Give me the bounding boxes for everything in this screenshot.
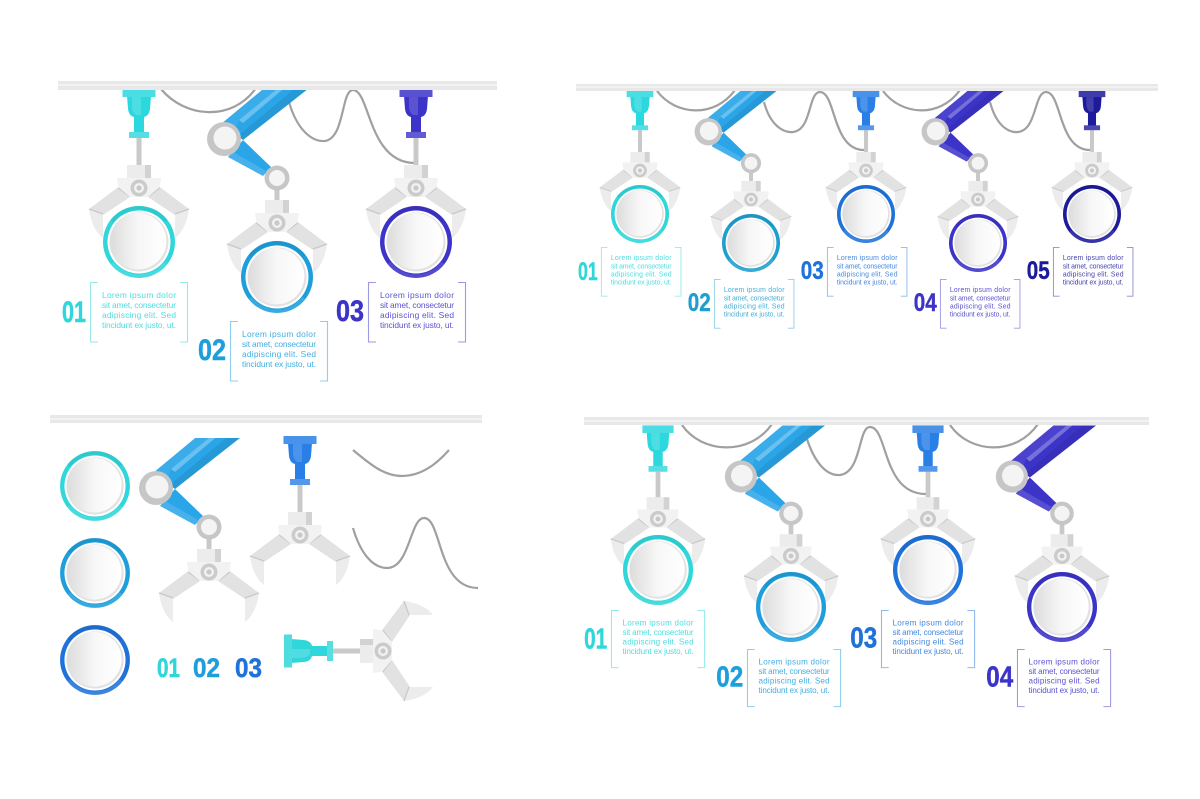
step 02 text: tincidunt ex justo, ut. [724,312,785,319]
step 03 text: tincidunt ex justo, ut. [380,320,454,330]
gripper 01 [611,425,705,605]
step 02 text [198,322,328,381]
step 01 text: sit amet, consectetur [611,263,672,270]
step 01 text: adipiscing elit. Sed [611,272,672,279]
step 01 text: 01 [62,296,86,329]
number labels: 02 [193,653,220,683]
panel: five-step robotic arm template [576,84,1158,328]
gripper 05 [1052,91,1132,243]
step 04 text: Lorem ipsum dolor [950,287,1011,294]
step 02 text: sit amet, consectetur [724,295,785,302]
step 02 text: sit amet, consectetur [242,339,316,349]
horizontal gripper [284,601,433,701]
step 01 text: tincidunt ex justo, ut. [102,320,176,330]
step 03 text: 03 [850,622,877,654]
step 03 text: tincidunt ex justo, ut. [837,280,898,287]
step 04 text [986,649,1111,707]
step 01 text [584,610,705,668]
step 02 text: tincidunt ex justo, ut. [242,359,316,369]
step 02 text: adipiscing elit. Sed [242,349,316,359]
ring cyan [60,451,130,521]
gripper 02 on arm [725,426,838,642]
gripper 03 [881,425,975,605]
step 05 text: Lorem ipsum dolor [1063,255,1124,262]
step 04 text: sit amet, consectetur [950,295,1011,302]
step 02 text: Lorem ipsum dolor [724,287,785,294]
step 03 text: adipiscing elit. Sed [837,272,898,279]
step 03 text: tincidunt ex justo, ut. [893,647,964,656]
step 03 text: sit amet, consectetur [837,263,898,270]
gripper 01 [600,91,680,243]
step 01 text: Lorem ipsum dolor [102,290,176,300]
step 03 text: Lorem ipsum dolor [893,618,964,627]
gripper 04 on arm [996,426,1109,642]
ceiling rail [58,81,497,90]
step 02 text: Lorem ipsum dolor [242,329,316,339]
step 04 text: tincidunt ex justo, ut. [950,312,1011,319]
step 01 text [578,247,681,296]
step 04 text: sit amet, consectetur [1029,667,1100,676]
step 01 text: 01 [584,623,607,655]
step 03 text [850,610,975,668]
step 03 text [801,247,907,296]
step 01 text: sit amet, consectetur [623,628,694,637]
ceiling rail [576,84,1158,91]
cables [682,424,1038,494]
step 03 text [336,282,466,342]
mount with open gripper [250,436,350,585]
step 04 text: Lorem ipsum dolor [1029,657,1100,666]
number labels: 03 [235,653,262,683]
cables [657,90,1090,150]
ceiling rail [50,415,482,423]
step 03 text: 03 [336,295,364,328]
gripper 01 [89,89,189,278]
step 04 text: adipiscing elit. Sed [1029,677,1100,686]
number labels [157,653,262,683]
cable short [353,450,449,476]
step 01 text: adipiscing elit. Sed [102,310,176,320]
step 02 text: 02 [688,290,711,317]
step 04 text: adipiscing elit. Sed [950,304,1011,311]
step 01 text: Lorem ipsum dolor [623,618,694,627]
number labels: 01 [157,653,180,683]
step 01 text: 01 [578,259,598,286]
step 02 text: tincidunt ex justo, ut. [759,686,830,695]
step 04 text [914,279,1020,328]
step 04 text: 04 [986,661,1013,693]
step 03 text: Lorem ipsum dolor [380,290,454,300]
ceiling rail [584,417,1149,425]
step 05 text: sit amet, consectetur [1063,263,1124,270]
step 02 text: adipiscing elit. Sed [724,304,785,311]
ring light blue [60,538,130,608]
step 05 text: 05 [1027,258,1050,285]
step 02 text: adipiscing elit. Sed [759,677,830,686]
step 02 text: Lorem ipsum dolor [759,657,830,666]
step 03 text: 03 [801,258,824,285]
gripper 03 [366,89,466,278]
step 01 text: tincidunt ex justo, ut. [623,647,694,656]
cables [161,88,414,163]
step 05 text: adipiscing elit. Sed [1063,272,1124,279]
step 02 text [688,279,794,328]
gripper 02 on arm [207,85,327,313]
cable wavy [353,518,478,588]
step 03 text: adipiscing elit. Sed [893,638,964,647]
step 01 text [62,282,188,342]
step 01 text: Lorem ipsum dolor [611,255,672,262]
step 02 text: sit amet, consectetur [759,667,830,676]
arm with open gripper [139,434,259,622]
step 03 text: Lorem ipsum dolor [837,255,898,262]
step 04 text: 04 [914,290,937,317]
step 01 text: adipiscing elit. Sed [623,638,694,647]
gripper 04 on arm [922,88,1018,272]
panel: three-step robotic arm template [58,81,497,381]
step 01 text: tincidunt ex justo, ut. [611,280,672,287]
step 01 text: sit amet, consectetur [102,300,176,310]
step 05 text [1027,247,1133,296]
gripper 02 on arm [695,88,791,272]
step 05 text: tincidunt ex justo, ut. [1063,280,1124,287]
ring blue [60,625,130,695]
step 03 text: sit amet, consectetur [380,300,454,310]
step 03 text: sit amet, consectetur [893,628,964,637]
panel: component kit [50,415,482,701]
step 02 text: 02 [716,661,743,693]
step 04 text: tincidunt ex justo, ut. [1029,686,1100,695]
gripper 03 [826,91,906,243]
panel: four-step robotic arm template [584,417,1149,707]
step 02 text: 02 [198,334,226,367]
step 03 text: adipiscing elit. Sed [380,310,454,320]
step 02 text [716,649,841,707]
